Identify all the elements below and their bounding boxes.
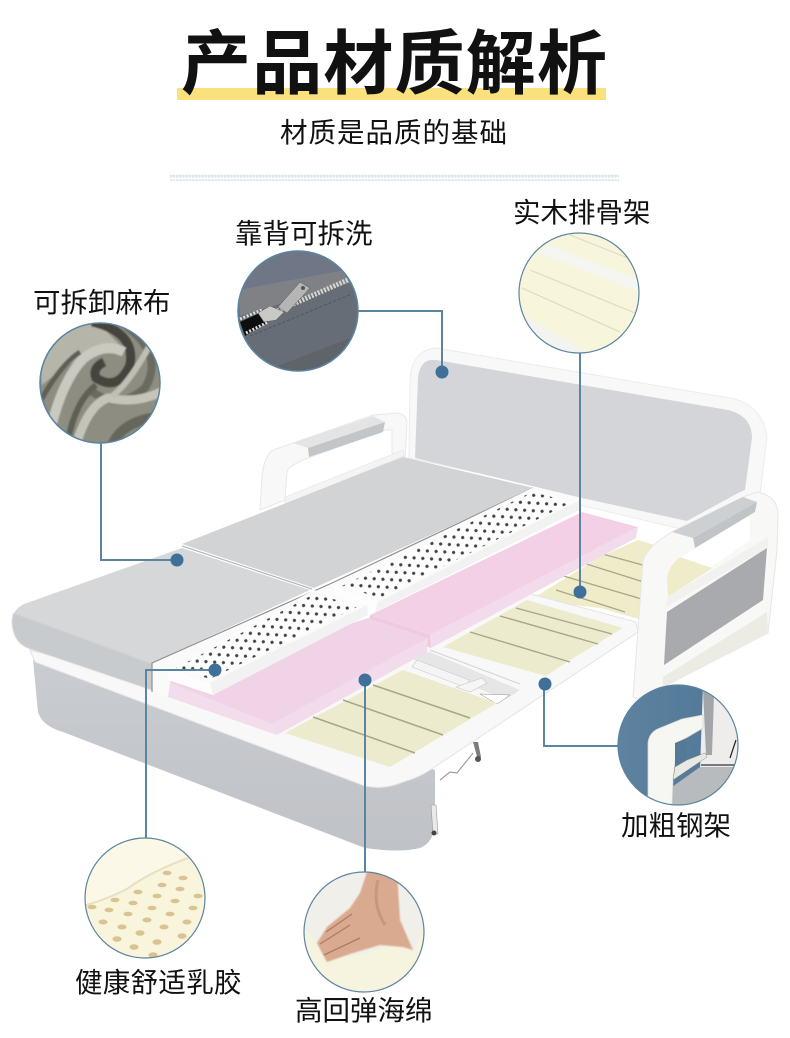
slats seen through opening bbox=[667, 557, 712, 597]
right arm pad front bbox=[693, 502, 757, 548]
cushion front face shading bbox=[12, 613, 152, 690]
right arm pad bbox=[672, 497, 757, 538]
anchor dot bbox=[358, 674, 372, 686]
right arm frame bbox=[633, 492, 778, 700]
rear slats bbox=[530, 540, 720, 625]
photo ring bbox=[40, 323, 160, 443]
left armrest frame bbox=[260, 413, 407, 510]
anchor dot bbox=[436, 366, 448, 378]
subtitle: 材质是品质的基础 bbox=[280, 117, 508, 148]
title: 产品材质解析 bbox=[181, 25, 608, 103]
pink foam rear bbox=[368, 512, 638, 648]
sofa bed illustration bbox=[12, 348, 778, 850]
zipper photo bbox=[238, 251, 358, 371]
anchor dot bbox=[574, 586, 586, 598]
cushion gap line bbox=[182, 546, 312, 589]
leader line bbox=[544, 684, 618, 746]
sofa back frame bbox=[409, 348, 767, 530]
photo ring bbox=[618, 685, 738, 805]
leader line bbox=[364, 680, 366, 873]
latex layer front bbox=[168, 590, 368, 695]
label: 加粗钢架 bbox=[621, 810, 731, 841]
anchor dot bbox=[538, 678, 552, 690]
arm top rail bbox=[665, 537, 768, 608]
label: 实木排骨架 bbox=[513, 197, 650, 228]
callout: high resilience foam bbox=[295, 674, 432, 1026]
left armrest pad bbox=[293, 416, 385, 457]
leader line bbox=[146, 670, 215, 838]
callout: removable backrest bbox=[235, 218, 448, 378]
lower recess bbox=[663, 612, 768, 687]
back seat cushion bbox=[182, 457, 534, 588]
photo ring bbox=[85, 838, 205, 958]
folding mechanism bars bbox=[405, 650, 520, 704]
front seat cushion bbox=[12, 548, 310, 690]
pink foam front bbox=[168, 618, 428, 735]
title highlight bar bbox=[177, 88, 606, 100]
fabric swirl photo bbox=[40, 324, 160, 442]
slats photo bbox=[519, 233, 640, 356]
anchor dot bbox=[170, 554, 184, 566]
anchor dot bbox=[208, 664, 222, 676]
leader line bbox=[579, 353, 581, 592]
latex photo bbox=[85, 838, 205, 958]
steel frame photo bbox=[618, 678, 740, 805]
dotted divider bbox=[170, 173, 619, 181]
extension slats bbox=[443, 600, 623, 676]
photo ring bbox=[238, 251, 358, 371]
right armrest and side panel bbox=[633, 492, 778, 700]
legs bbox=[431, 742, 481, 836]
side fabric panel bbox=[664, 548, 767, 665]
opening under the arm bbox=[667, 515, 750, 597]
sofa back cushion bbox=[415, 360, 752, 521]
leader line bbox=[101, 443, 177, 560]
label: 健康舒适乳胶 bbox=[75, 967, 242, 998]
label: 可拆卸麻布 bbox=[33, 287, 170, 318]
label: 高回弹海绵 bbox=[295, 995, 432, 1026]
callout: steel frame bbox=[538, 678, 740, 841]
label: 靠背可拆洗 bbox=[235, 218, 372, 249]
white divider strip bbox=[152, 488, 582, 697]
photo ring bbox=[519, 233, 639, 353]
callout: latex bbox=[75, 664, 242, 998]
photo ring bbox=[304, 872, 424, 992]
base body fabric bbox=[33, 660, 435, 850]
front slats bbox=[285, 670, 497, 767]
callout: linen fabric bbox=[33, 287, 184, 566]
foam photo bbox=[304, 872, 424, 992]
leader line bbox=[358, 311, 442, 372]
white steel frame bbox=[30, 590, 638, 787]
cushion edge line bbox=[152, 488, 533, 692]
latex layer rear bbox=[334, 488, 580, 612]
callout: wood slats bbox=[513, 197, 650, 598]
left arm lower rail bbox=[285, 450, 404, 504]
